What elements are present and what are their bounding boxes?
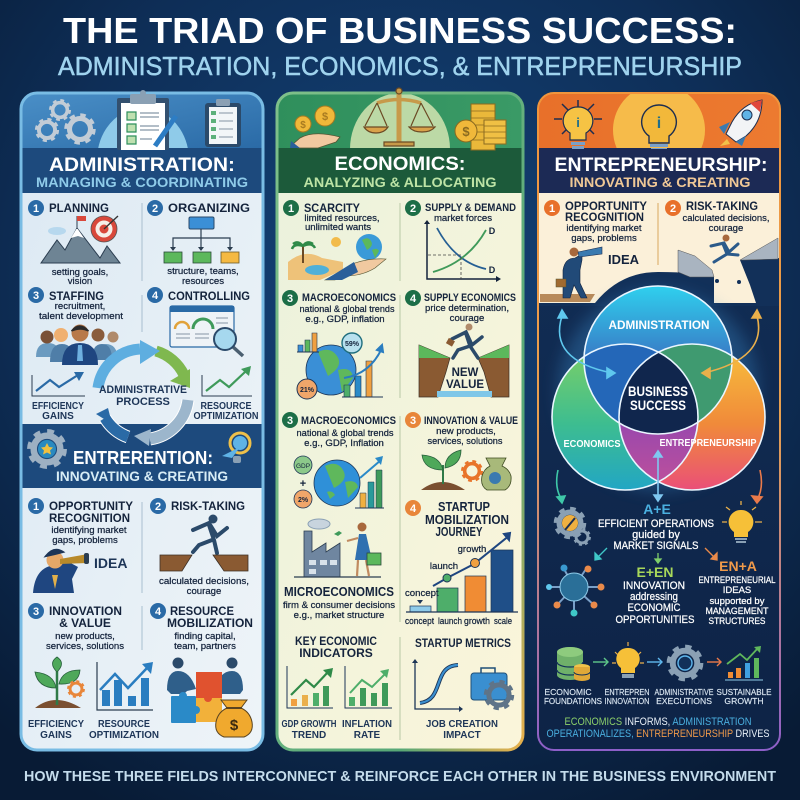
chart: inflation rate: RATE [354, 730, 381, 741]
labels: process row [544, 687, 772, 706]
arrow [707, 658, 721, 666]
text: en plus a: ENTREPRENEURIAL [698, 575, 776, 586]
heading: economics [304, 154, 497, 190]
footer text: HOW THESE THREE FIELDS INTERCONNECT & REINFORCE EACH OTHER IN THE BUSINESS ENVIRONMENT [24, 768, 776, 785]
icon: bulb [612, 642, 644, 678]
item: risk-taking: 2 [670, 203, 676, 215]
chart: s-curve [412, 659, 463, 712]
item: risk-taking [665, 199, 778, 277]
item: scarcity: unlimited wants [305, 222, 371, 233]
icon: central bulb: i [657, 115, 661, 132]
item: staffing: STAFFING [49, 289, 104, 303]
text: en plus a: MANAGEMENT [706, 606, 769, 617]
icon: cliff jump new value: NEW [452, 367, 479, 379]
icon: coins and hand: $ [300, 120, 306, 131]
section: startup metrics: STARTUP METRICS [415, 638, 511, 650]
item: risk-taking: 2 [155, 501, 161, 513]
chart: gdp growth trend [282, 666, 336, 741]
text: summary statement: ECONOMICS INFORMS, ADMINISTRATION [564, 716, 752, 728]
icon: dashboard with magnifier [170, 306, 243, 356]
item: resource mobilization: RESOURCE [170, 604, 234, 618]
icon: globe with bars [297, 333, 383, 399]
item: supply and demand chart [405, 200, 516, 282]
icon: coins and hand [290, 106, 340, 148]
item: organizing: structure, teams, [167, 266, 239, 277]
chart: efficiency gains: EFFICIENCY [32, 401, 84, 412]
chart: inflation rate [342, 666, 392, 741]
icon: growth chart [97, 662, 153, 710]
item: resource mobilization: finding capital, [174, 631, 236, 642]
item: supply and demand chart: D [489, 226, 496, 236]
item: scarcity [283, 200, 386, 280]
text: a plus e: MARKET SIGNALS [614, 540, 698, 552]
icon: clipboard with pen [117, 90, 176, 150]
heading: entrepreneurship: INNOVATING & CREATING [570, 174, 751, 190]
icon: cliff jump new value [419, 324, 509, 397]
chart: startup journey bars: launch [438, 616, 462, 627]
item: macroeconomics lower: MACROECONOMICS [301, 415, 396, 427]
item: innovation and value: services, solutions [46, 641, 124, 652]
chart: gdp growth trend: TREND [292, 730, 326, 741]
item: opportunity recognition: identifying market [51, 525, 127, 536]
icon: team of people [36, 324, 118, 365]
heading: entrerention: ENTRERENTION: [73, 448, 213, 468]
item: risk-taking: RISK-TAKING [171, 499, 245, 513]
icon: briefcase and gear [471, 668, 512, 708]
item: startup mobilization journey: MOBILIZATION [425, 512, 509, 527]
text: en plus a: supported by [710, 596, 765, 607]
chart: startup journey bars: growth [464, 616, 490, 627]
item: innovation and value: & VALUE [59, 616, 111, 630]
icon: runner over gap [160, 514, 248, 571]
item: controlling [147, 287, 250, 356]
title: ADMINISTRATION, ECONOMICS, & ENTREPRENEURSHIP [58, 51, 742, 81]
item: organizing: 2 [152, 203, 158, 215]
item: opportunity recognition: OPPORTUNITY [49, 499, 133, 513]
diagram: venn of three fields [552, 286, 765, 490]
icon: network globe [546, 564, 604, 616]
item: macroeconomics upper: MACROECONOMICS [302, 292, 396, 304]
item: macroeconomics lower: e.g., GDP, Inflation [304, 438, 384, 449]
item: supply and demand chart: SUPPLY & DEMAND [425, 202, 516, 214]
text: summary statement: OPERATIONALIZES, ENTREPRENEURSHIP DRIVES [546, 728, 770, 740]
item: macroeconomics lower [282, 412, 396, 508]
item: supply economics: price determination, [425, 303, 509, 314]
icon: globe with gdp bubbles [294, 456, 384, 508]
item: risk-taking: calculated decisions, [682, 213, 770, 224]
text: en plus a: EN+A [719, 558, 757, 574]
labels: process row: INNOVATION [604, 696, 650, 706]
diagram: venn of three fields: SUCCESS [630, 398, 686, 413]
icon: data stack [557, 647, 590, 681]
item: resource mobilization: MOBILIZATION [167, 616, 253, 630]
icon: gears [37, 101, 94, 142]
panel: administration [21, 90, 263, 750]
text: a plus e: A+E [643, 501, 671, 517]
labels: efficiency gains and resource optimization: EFFICIENCY [28, 719, 84, 730]
chart: startup journey bars: concept [405, 616, 434, 627]
text: en plus a: STRUCTURES [708, 616, 766, 627]
item: planning: vision [68, 276, 92, 287]
item: innovation and value: new products, [55, 631, 115, 642]
item: opportunity recognition: identifying market [566, 223, 642, 234]
icon: mountain and target [41, 216, 120, 263]
section: key economic indicators: KEY ECONOMIC [295, 634, 377, 648]
icon: man with telescope [33, 550, 89, 593]
chart: startup journey bars: scale [494, 616, 512, 627]
process row: foundations to growth [544, 642, 772, 706]
item: innovation and value economics [405, 412, 518, 490]
text: e plus en: E+EN [637, 564, 673, 580]
item: staffing: talent development [39, 311, 123, 322]
icon: gear with star [30, 432, 64, 466]
text: en plus a [698, 558, 776, 627]
section: startup metrics [412, 638, 512, 741]
chart: startup journey bars: concept [405, 588, 439, 599]
panel: economics [277, 88, 523, 750]
text: e plus en: INNOVATION [623, 580, 685, 592]
item: startup mobilization journey [405, 499, 518, 627]
item: innovation and value economics: services, solutions [428, 436, 503, 447]
chart: resource optimization: OPTIMIZATION [194, 411, 258, 422]
icon: central bulb [642, 105, 676, 149]
item: scarcity: SCARCITY [304, 201, 360, 215]
labels: efficiency gains and resource optimization [28, 719, 159, 741]
icon: refresh idea [222, 433, 250, 463]
panel: entrepreneurship [536, 84, 780, 750]
item: risk-taking: courage [709, 223, 743, 234]
item: innovation and value: 3 [33, 606, 39, 618]
item: opportunity recognition: 1 [549, 203, 555, 215]
item: supply and demand chart: 2 [410, 203, 416, 215]
icon: coins and hand: $ [322, 111, 328, 123]
heading: economics: ANALYZING & ALLOCATING [304, 174, 497, 190]
item: startup mobilization journey: STARTUP [438, 499, 490, 514]
item: supply economics [405, 290, 516, 397]
labels: process row: SUSTAINABLE [716, 687, 772, 697]
item: risk-taking: RISK-TAKING [686, 199, 758, 213]
text: microeconomics: firm & consumer decisions [283, 600, 395, 611]
icon: growth chart [725, 646, 763, 680]
item: supply economics: 4 [410, 293, 417, 305]
heading: administration [36, 155, 248, 190]
item: staffing [28, 287, 123, 365]
item: opportunity recognition: gaps, problems [52, 535, 118, 546]
item: opportunity recognition: IDEA [94, 555, 127, 571]
item: opportunity recognition: IDEA [608, 252, 640, 267]
icon: org chart [164, 217, 239, 263]
item: supply economics: SUPPLY ECONOMICS [424, 292, 516, 304]
icon: globe with gdp bubbles: + [300, 478, 306, 490]
item: organizing: resources [182, 276, 224, 287]
labels: efficiency gains and resource optimization: RESOURCE [98, 719, 150, 730]
diagram: administrative process cycle [96, 340, 190, 446]
diagram: venn of three fields: BUSINESS [628, 384, 688, 399]
diagram: venn of three fields: ECONOMICS [564, 439, 621, 450]
section: key economic indicators [282, 634, 392, 741]
labels: process row: ECONOMIC [544, 687, 592, 697]
item: controlling: CONTROLLING [168, 289, 250, 303]
icon: desert oasis and globe [288, 234, 386, 280]
icon: glowing bulb [554, 100, 602, 149]
item: organizing [147, 200, 250, 287]
item: organizing: ORGANIZING [168, 201, 250, 215]
item: scarcity: limited resources, [304, 213, 380, 224]
icon: globe with bars: 21% [300, 387, 315, 394]
arrow [647, 658, 662, 666]
icon: glowing bulb: i [576, 115, 580, 130]
item: opportunity recognition: gaps, problems [571, 233, 637, 244]
item: resource mobilization: team, partners [174, 641, 236, 652]
text: e plus en: ECONOMIC [628, 602, 681, 614]
arrows: links around venn [557, 310, 762, 503]
text: microeconomics: MICROECONOMICS [284, 584, 394, 599]
chart: startup journey bars [405, 533, 518, 627]
icon: coin stacks: $ [462, 124, 470, 139]
item: innovation and value economics: 3 [410, 415, 416, 427]
chart: efficiency gains: GAINS [42, 411, 74, 422]
item: opportunity recognition [28, 498, 133, 593]
heading: entrerention [56, 448, 228, 484]
heading: entrepreneurship: ENTREPRENEURSHIP: [554, 155, 768, 176]
labels: process row: ENTREPREN [604, 687, 650, 697]
heading: entrepreneurship [554, 155, 768, 190]
item: supply economics: courage [450, 313, 484, 324]
text: en plus a: IDEAS [723, 585, 751, 596]
labels: process row: FOUNDATIONS [544, 696, 602, 706]
icon: puzzle team and money bag [167, 658, 252, 737]
icon: checklist [205, 99, 241, 147]
icon: gear [669, 647, 701, 679]
heading: administration: ADMINISTRATION: [49, 155, 235, 176]
text: a plus e: guided by [632, 529, 680, 541]
item: opportunity recognition: RECOGNITION [565, 210, 644, 224]
item: startup mobilization journey: 4 [410, 503, 417, 515]
item: startup mobilization journey: JOURNEY [436, 524, 483, 539]
icon: sprout with gear [35, 657, 84, 708]
item: innovation and value [28, 603, 124, 652]
item: opportunity recognition: RECOGNITION [49, 511, 130, 525]
labels: process row: GROWTH [724, 696, 764, 706]
text: microeconomics: e.g., market structure [294, 610, 384, 621]
title [58, 10, 742, 81]
icon: puzzle team and money bag: $ [230, 717, 239, 734]
icon: coin stacks [455, 104, 506, 150]
item: planning: PLANNING [49, 201, 109, 215]
labels: process row: ADMINISTRATIVE [654, 687, 714, 697]
icon: globe with gdp bubbles: GDP [296, 463, 310, 470]
icon: globe with gdp bubbles: 2% [298, 497, 309, 504]
text: e plus en: addressing [630, 591, 678, 603]
chart: gdp growth trend: GDP GROWTH [282, 719, 336, 730]
item: macroeconomics upper: 3 [287, 293, 293, 305]
item: resource mobilization: 4 [155, 606, 162, 618]
item: macroeconomics upper [282, 290, 396, 399]
icon: factory and shopper [294, 519, 381, 577]
item: risk-taking: calculated decisions, [159, 576, 249, 587]
labels: efficiency gains and resource optimization: GAINS [40, 730, 72, 741]
icon: rocket [719, 100, 762, 146]
text: e plus en: OPPORTUNITIES [616, 614, 694, 626]
item: innovation and value economics: INNOVATION & VALUE [424, 415, 518, 427]
text: a plus e: EFFICIENT OPERATIONS [598, 518, 714, 530]
icon: balance scale [364, 88, 435, 146]
text: summary statement [546, 716, 770, 740]
item: resource mobilization [150, 603, 253, 652]
icon: lit bulb [722, 501, 762, 543]
item: staffing: 3 [33, 290, 39, 302]
chart: startup journey bars: growth [458, 544, 486, 555]
item: supply and demand chart: D [489, 265, 496, 275]
item: innovation and value economics: new products, [436, 426, 496, 437]
section: startup metrics: IMPACT [443, 730, 481, 741]
item: opportunity recognition: 1 [33, 501, 39, 513]
item: innovation and value: INNOVATION [49, 604, 122, 618]
title: THE TRIAD OF BUSINESS SUCCESS: [63, 10, 737, 51]
item: macroeconomics lower: 3 [287, 415, 293, 427]
icon: globe with bars: 59% [345, 341, 360, 348]
diagram: venn of three fields: ADMINISTRATION [608, 320, 710, 332]
item: planning [28, 200, 120, 287]
icon: runner between cliffs [678, 234, 778, 277]
item: opportunity recognition: OPPORTUNITY [565, 199, 647, 213]
heading: economics: ECONOMICS: [334, 154, 466, 175]
icon: sprout gear money bag [421, 450, 511, 490]
item: risk-taking [150, 498, 249, 597]
icon: gears with pen [556, 509, 590, 545]
icon: cliff jump new value: VALUE [446, 379, 484, 391]
item: opportunity recognition [540, 199, 647, 302]
item: macroeconomics upper: e.g., GDP, inflation [305, 314, 385, 325]
item: scarcity: 1 [288, 203, 294, 215]
diagram: administrative process cycle: PROCESS [116, 396, 170, 408]
icon: man with telescope on ledge [540, 247, 602, 302]
arrows: branch from a plus e [595, 548, 717, 563]
labels: process row: EXECUTIONS [656, 696, 712, 706]
item: planning: 1 [33, 203, 39, 215]
chart: startup journey bars: launch [430, 561, 458, 572]
item: macroeconomics lower: national & global trends [296, 428, 394, 439]
text: e plus en [616, 564, 694, 626]
chart: resource optimization: RESOURCE [200, 401, 252, 412]
item: planning: setting goals, [52, 267, 108, 278]
item: controlling: 4 [152, 290, 159, 302]
heading: entrerention: INNOVATING & CREATING [56, 469, 228, 484]
section: key economic indicators: INDICATORS [299, 646, 373, 660]
chart: efficiency gains [32, 372, 85, 422]
arrow [593, 658, 608, 666]
labels: efficiency gains and resource optimization: OPTIMIZATION [89, 730, 159, 741]
item: supply and demand chart: market forces [434, 213, 492, 224]
item: macroeconomics upper: national & global trends [300, 304, 395, 315]
chart: inflation rate: INFLATION [342, 719, 392, 730]
diagram: venn of three fields: ENTREPRENEURSHIP [660, 438, 757, 449]
diagram: administrative process cycle: ADMINISTRATIVE [99, 384, 187, 396]
section: startup metrics: JOB CREATION [426, 719, 498, 730]
heading: administration: MANAGING & COORDINATING [36, 174, 248, 190]
item: staffing: recruitment, [55, 301, 105, 312]
chart: resource optimization [194, 366, 258, 422]
text: a plus e [598, 501, 714, 552]
text: microeconomics [283, 584, 395, 621]
item: risk-taking: courage [187, 586, 221, 597]
